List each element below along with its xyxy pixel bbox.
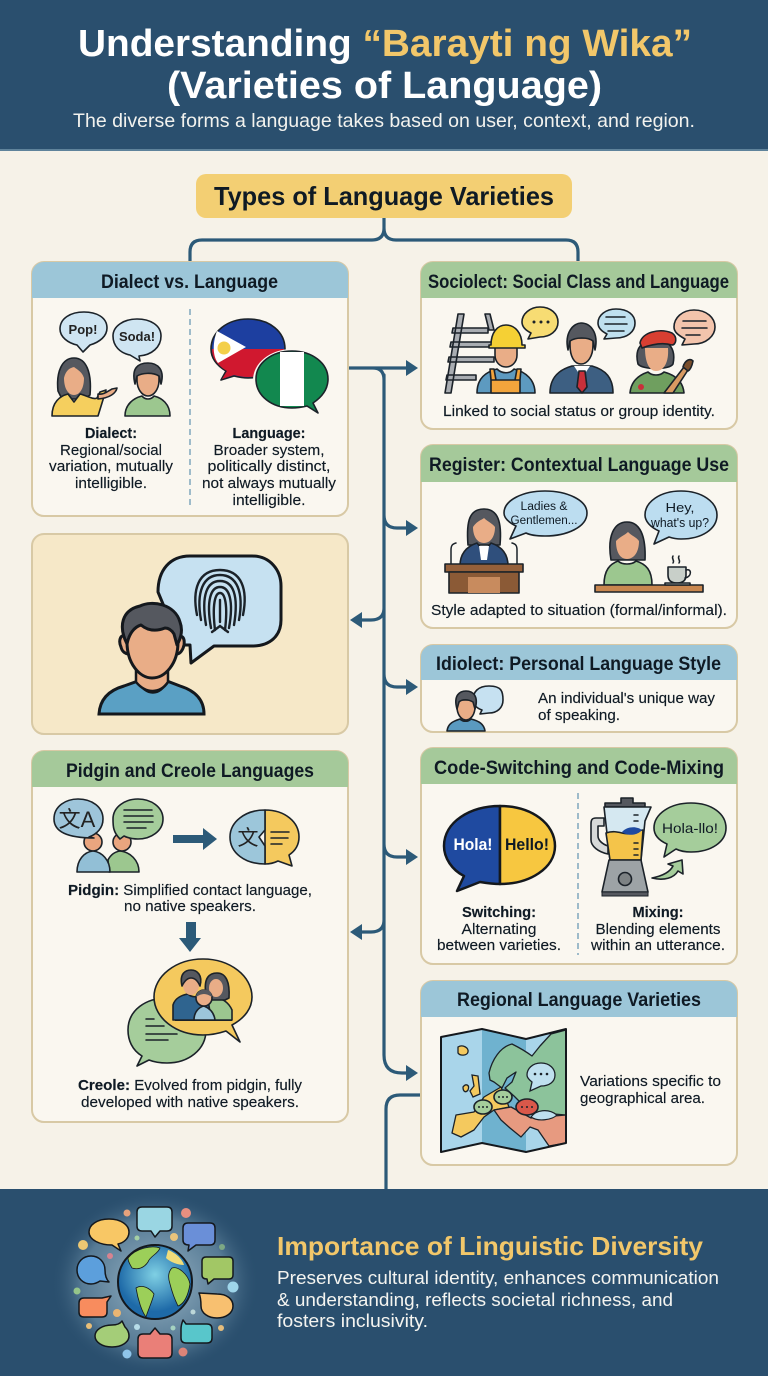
- panel heading: Dialect vs. Language: [101, 272, 278, 293]
- icon: fingerprint speech bubble: [158, 556, 281, 663]
- icon: dialect speakers: [52, 312, 170, 416]
- language description: Language:: [232, 425, 306, 442]
- mixing description: Blending elements: [596, 921, 720, 938]
- panel heading: Regional Language Varieties: [457, 990, 701, 1011]
- mixing description: within an utterance.: [590, 937, 725, 954]
- language description: not always mutually: [202, 475, 336, 492]
- switching description: Switching:: [462, 904, 536, 921]
- icon: merged speech bubble: 文: [238, 827, 258, 850]
- small decorative bubbles: [74, 1208, 238, 1358]
- language description: Broader system,: [214, 442, 324, 459]
- icon: dialect speakers: Soda!: [119, 329, 155, 344]
- switching description: between varieties.: [437, 937, 561, 954]
- icon: dialect speakers: Pop!: [69, 322, 97, 337]
- footer description: fosters inclusivity.: [277, 1310, 428, 1331]
- icon: merged speech bubble: [230, 810, 299, 866]
- icon: speaker at podium: Ladies &: [520, 501, 568, 513]
- dialect description: Regional/social: [60, 442, 162, 459]
- idiolect description: An individual's unique way: [538, 690, 715, 707]
- connector: top branch: [190, 218, 578, 263]
- icon: person: [99, 603, 204, 714]
- icon: blender with bubble: [591, 798, 726, 896]
- panel heading: Pidgin and Creole Languages: [66, 761, 314, 782]
- panel: dialect vs language: [32, 262, 348, 516]
- footer description: & understanding, reflects societal richness, and: [277, 1289, 673, 1310]
- panel heading: Idiolect: Personal Language Style: [436, 654, 721, 675]
- panel: pidgin and creole: [32, 751, 348, 1122]
- connector: regional to footer: [386, 1095, 420, 1190]
- arrow: pidgin merge: [173, 828, 217, 850]
- icon: folded map of Europe: [441, 1029, 566, 1152]
- register caption: Style adapted to situation (formal/informal).: [431, 602, 727, 619]
- icon: artist with bubble: [630, 310, 715, 393]
- dialect description: intelligible.: [75, 475, 147, 492]
- icon: worker with bubble: [477, 307, 558, 393]
- icon: two speakers contact: [54, 799, 163, 872]
- icon: globe with speech bubbles: [74, 1207, 238, 1358]
- footer description: Preserves cultural identity, enhances communication: [277, 1267, 719, 1288]
- pidgin description line two: no native speakers.: [124, 898, 256, 915]
- icon: speaker at podium: Gentlemen...: [510, 515, 578, 527]
- language description: politically distinct,: [208, 458, 330, 475]
- footer description: [277, 1267, 719, 1331]
- icon: switching speech bubble: Hello!: [505, 835, 549, 854]
- arrow: pidgin to creole: [179, 922, 201, 952]
- footer banner: [0, 1189, 768, 1376]
- header banner: [0, 0, 768, 151]
- icon: blender with bubble: Hola-llo!: [662, 820, 718, 836]
- panel: regional varieties: [421, 981, 737, 1165]
- title line one: Understanding “Barayti ng Wika”: [78, 23, 692, 65]
- icon: speaker at podium: [445, 491, 587, 593]
- regional description: geographical area.: [580, 1090, 705, 1107]
- connector: central trunk with arrows: [349, 360, 418, 1081]
- icon: casual speaker with coffee: what's up?: [650, 515, 709, 530]
- footer heading: Importance of Linguistic Diversity: [277, 1231, 704, 1261]
- panel: idiolect illustration: [32, 534, 348, 734]
- subtitle: The diverse forms a language takes based on user, context, and region.: [73, 110, 695, 132]
- panel: code-switching and code-mixing: [421, 748, 737, 964]
- language description: intelligible.: [232, 492, 306, 509]
- icon: person with empty bubble: [447, 686, 503, 731]
- panel: register: [421, 445, 737, 628]
- pidgin description: Pidgin: Simplified contact language,: [68, 882, 312, 899]
- icon: businessman with bubble: [550, 309, 635, 393]
- icon: two speakers contact: 文A: [59, 807, 96, 832]
- language description: [202, 425, 336, 509]
- switching description: [437, 904, 561, 954]
- panel: idiolect: [421, 645, 737, 732]
- dialect description: Dialect:: [85, 425, 137, 442]
- icon: switching speech bubble: Hola!: [454, 835, 492, 854]
- dialect description: variation, mutually: [49, 458, 174, 475]
- section heading pill: [196, 174, 572, 218]
- icon: flag speech bubbles: [211, 319, 331, 413]
- section heading pill: Types of Language Varieties: [214, 181, 554, 211]
- icon: switching speech bubble: [444, 806, 555, 891]
- icon: casual speaker with coffee: [595, 491, 717, 592]
- icon: casual speaker with coffee: Hey,: [666, 500, 694, 515]
- sociolect caption: Linked to social status or group identity.: [443, 403, 715, 420]
- icon: creole speech bubbles with family: [128, 959, 252, 1066]
- creole description line two: developed with native speakers.: [81, 1094, 299, 1111]
- regional description: Variations specific to: [580, 1073, 721, 1090]
- icon: ladder: [445, 314, 494, 393]
- title line two: (Varieties of Language): [167, 65, 602, 107]
- idiolect description: [538, 690, 715, 724]
- creole description: Creole: Evolved from pidgin, fully: [78, 1077, 302, 1094]
- panel heading: Register: Contextual Language Use: [429, 455, 729, 476]
- speech bubbles ring: [77, 1207, 233, 1358]
- regional description: [580, 1073, 721, 1107]
- mixing description: Mixing:: [632, 904, 684, 921]
- switching description: Alternating: [462, 921, 536, 938]
- panel heading: Code-Switching and Code-Mixing: [434, 758, 724, 779]
- dialect description: [49, 425, 174, 492]
- idiolect description: of speaking.: [538, 707, 620, 724]
- panel heading: Sociolect: Social Class and Language: [428, 272, 729, 293]
- panel: sociolect: [421, 262, 737, 429]
- mixing description: [590, 904, 725, 954]
